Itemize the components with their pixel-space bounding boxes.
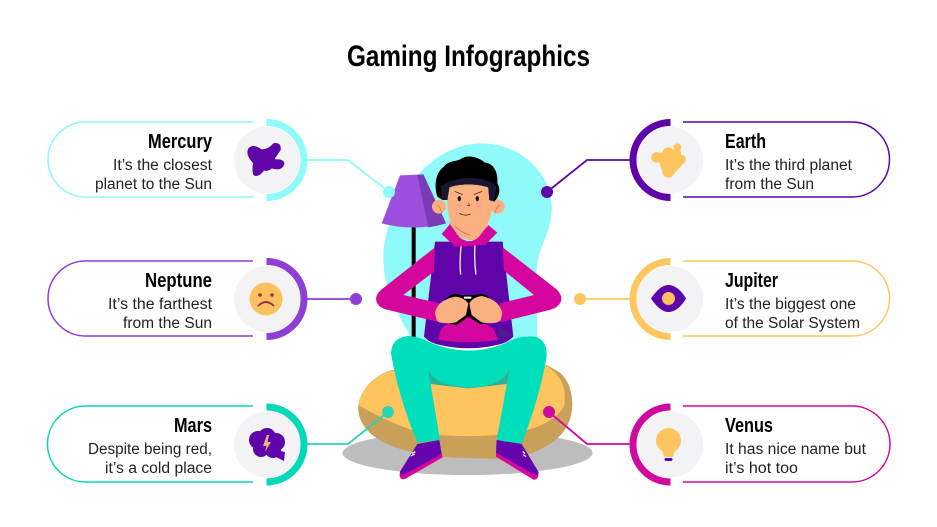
description: from the Sun bbox=[123, 315, 212, 332]
hood collar bbox=[442, 224, 497, 247]
ring arc bbox=[633, 262, 670, 336]
description bbox=[725, 296, 860, 332]
title: Gaming Infographics bbox=[347, 40, 590, 73]
description: Despite being red, bbox=[88, 441, 212, 458]
arms bbox=[376, 247, 561, 322]
floor lamp bbox=[382, 174, 446, 338]
connector bbox=[307, 160, 389, 192]
pill outline bbox=[48, 261, 253, 336]
ring arc bbox=[633, 122, 670, 198]
panel: Jupiter bbox=[574, 261, 890, 336]
pill outline bbox=[48, 406, 253, 482]
icon: light bulb bbox=[656, 428, 681, 461]
shoes bbox=[400, 440, 539, 480]
description: It’s the biggest one bbox=[725, 296, 856, 313]
connector bbox=[580, 298, 630, 300]
panel: Venus bbox=[543, 406, 890, 482]
icon: brain with bolt bbox=[249, 428, 285, 461]
floor shadow bbox=[342, 431, 592, 475]
heading: Venus bbox=[725, 415, 773, 437]
panel: Neptune bbox=[48, 261, 362, 336]
description: It has nice name but bbox=[725, 441, 867, 458]
description: it’s hot too bbox=[725, 460, 798, 477]
description bbox=[725, 441, 867, 477]
heading: Neptune bbox=[145, 270, 212, 292]
icon disc bbox=[637, 412, 703, 478]
ring arc bbox=[633, 407, 670, 482]
connector dot bbox=[541, 186, 553, 198]
ring arc bbox=[266, 122, 304, 198]
icon disc bbox=[234, 127, 300, 193]
connector dot bbox=[543, 406, 555, 418]
icon: sad face bbox=[250, 282, 282, 316]
pill outline bbox=[683, 406, 890, 482]
description bbox=[108, 296, 213, 332]
connector bbox=[307, 412, 388, 444]
panel: Mercury bbox=[48, 122, 395, 198]
connector bbox=[549, 412, 630, 444]
pill outline bbox=[683, 122, 890, 197]
description: It’s the closest bbox=[113, 157, 213, 174]
ring arc bbox=[266, 262, 304, 336]
background blob bbox=[383, 143, 552, 343]
description: of the Solar System bbox=[725, 315, 860, 332]
heading: Mars bbox=[174, 415, 212, 437]
panel: Earth bbox=[541, 122, 890, 198]
connector bbox=[547, 160, 630, 192]
hair bbox=[436, 157, 499, 202]
icon: splat bbox=[247, 143, 284, 176]
connector bbox=[307, 298, 356, 300]
description: planet to the Sun bbox=[95, 176, 212, 193]
controller and hands bbox=[435, 294, 502, 325]
pill outline bbox=[48, 122, 253, 197]
heading: Jupiter bbox=[725, 270, 778, 292]
connector dot bbox=[382, 406, 394, 418]
icon disc bbox=[234, 412, 300, 478]
illustration: gamer character bbox=[342, 143, 592, 480]
description: It’s the farthest bbox=[108, 296, 213, 313]
face details bbox=[458, 196, 461, 201]
icon disc bbox=[637, 127, 703, 193]
icon: puzzle piece bbox=[651, 143, 686, 178]
pill outline bbox=[683, 261, 890, 336]
description: It’s the third planet bbox=[725, 157, 853, 174]
torso and hoodie bbox=[424, 242, 513, 348]
panel: Mars bbox=[48, 406, 394, 482]
connector dot bbox=[350, 293, 362, 305]
description bbox=[95, 157, 213, 193]
ring arc bbox=[266, 407, 304, 482]
connector dot bbox=[383, 186, 395, 198]
connector dot bbox=[574, 293, 586, 305]
head bbox=[432, 157, 505, 247]
heading: Earth bbox=[725, 131, 766, 153]
description bbox=[725, 157, 853, 193]
description: it’s a cold place bbox=[105, 460, 212, 477]
heading: Mercury bbox=[148, 131, 213, 153]
bean bag bbox=[358, 365, 572, 459]
description bbox=[88, 441, 212, 477]
icon disc bbox=[234, 266, 300, 332]
icon: eye bbox=[651, 285, 686, 312]
description: from the Sun bbox=[725, 176, 814, 193]
icon disc bbox=[637, 266, 703, 332]
legs bbox=[391, 336, 547, 444]
